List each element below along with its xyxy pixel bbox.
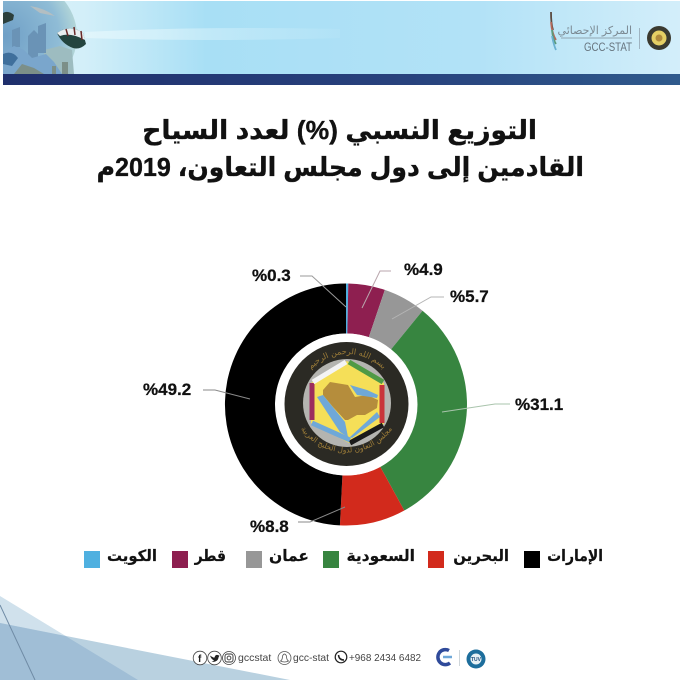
segment: Kuwait 0.3%	[346, 283, 348, 334]
header banner	[0, 0, 680, 91]
legend: UAE	[524, 548, 603, 568]
emblem Red Sea	[317, 395, 348, 437]
emblem top calligraphy: بسم الله الرحمن الرحيم	[311, 348, 384, 370]
emblem white ring	[276, 334, 418, 476]
legend: Saudi Arabia: السعودية	[346, 548, 415, 565]
segment: Saudi Arabia 31.1%	[380, 311, 467, 511]
leader line and label: Oman	[392, 287, 489, 319]
leader line and label: Oman: %5.7	[450, 287, 489, 306]
leader line and label: Bahrain	[250, 507, 345, 536]
handle: gccstat: gccstat	[238, 652, 271, 664]
icon: G quality mark	[438, 650, 452, 665]
legend: Qatar	[172, 548, 226, 568]
emblem bottom calligraphy: مجلس التعاون لدول الخليج العربية	[302, 428, 392, 454]
leader line and label: Kuwait: %0.3	[252, 266, 291, 285]
small GCC emblem	[647, 26, 671, 50]
header sky background	[3, 1, 680, 74]
data labels and leader lines	[143, 260, 563, 536]
legend: Kuwait: الكويت	[107, 548, 157, 565]
legend: Qatar: قطر	[194, 548, 226, 565]
segment: Oman 5.7%	[369, 290, 423, 350]
phone number: +968 2434 6482	[349, 652, 421, 664]
logo ribbon	[551, 12, 556, 50]
leader line and label: Saudi Arabia	[442, 395, 563, 414]
segment: Bahrain 8.8%	[340, 467, 404, 526]
segment: UAE 49.2%	[225, 284, 346, 525]
footer divider	[459, 650, 460, 666]
title line 1: التوزيع النسبي (%) لعدد السياح	[142, 115, 537, 146]
GCC-STAT logo	[551, 12, 671, 54]
handle: gcc-stat: gcc-stat	[293, 652, 329, 664]
emblem Arabian Sea	[350, 412, 380, 438]
icon: instagram	[222, 652, 236, 664]
emblem Arabian peninsula map	[323, 382, 378, 420]
footer contact row	[193, 650, 485, 668]
emblem hexagon	[311, 361, 384, 443]
header dark band	[3, 74, 680, 85]
leader line and label: Qatar: %4.9	[404, 260, 443, 279]
leader line and label: UAE: %49.2	[143, 380, 191, 399]
title line 2: القادمين إلى دول مجلس التعاون، 2019م	[97, 154, 584, 183]
legend: Oman: عمان	[269, 548, 309, 565]
icon: TUV certification badge: TUV	[471, 657, 482, 663]
legend: UAE: الإمارات	[547, 548, 603, 565]
globe with city collage	[3, 1, 76, 74]
logo divider	[639, 28, 640, 49]
logo subtitle line	[561, 37, 632, 39]
leader line and label: Saudi Arabia: %31.1	[515, 395, 563, 414]
legend: Saudi Arabia	[323, 548, 415, 568]
emblem hexagon coloured edges	[312, 362, 383, 443]
icon: twitter	[208, 651, 221, 665]
icon: facebook: f	[198, 654, 202, 665]
legend: Kuwait	[84, 548, 157, 568]
legend: Oman	[246, 548, 309, 568]
GCC emblem	[284, 334, 418, 476]
icon: TUV certification badge	[466, 650, 486, 668]
donut chart	[225, 283, 467, 526]
leader line and label: Bahrain: %8.8	[250, 517, 289, 536]
legend	[84, 548, 603, 568]
emblem silver ring	[303, 359, 391, 447]
logo Latin name: GCC-STAT	[584, 40, 633, 54]
icon: snapchat	[278, 652, 291, 664]
emblem dark disc	[284, 342, 408, 466]
header light streak	[85, 28, 340, 40]
footer corner decoration	[0, 596, 290, 680]
leader line and label: Qatar	[362, 260, 443, 308]
icon: whatsapp	[335, 651, 347, 663]
title	[97, 115, 584, 183]
parachute icon	[57, 27, 86, 48]
leader line and label: UAE	[143, 380, 250, 399]
logo Arabic name: المركز الإحصائي	[558, 25, 632, 37]
emblem Arabian Gulf	[350, 385, 378, 398]
icon: facebook	[193, 651, 207, 665]
legend: Bahrain	[428, 548, 509, 568]
leader line and label: Kuwait	[252, 266, 346, 307]
segment: Qatar 4.9%	[347, 284, 385, 337]
legend: Bahrain: البحرين	[453, 548, 509, 565]
